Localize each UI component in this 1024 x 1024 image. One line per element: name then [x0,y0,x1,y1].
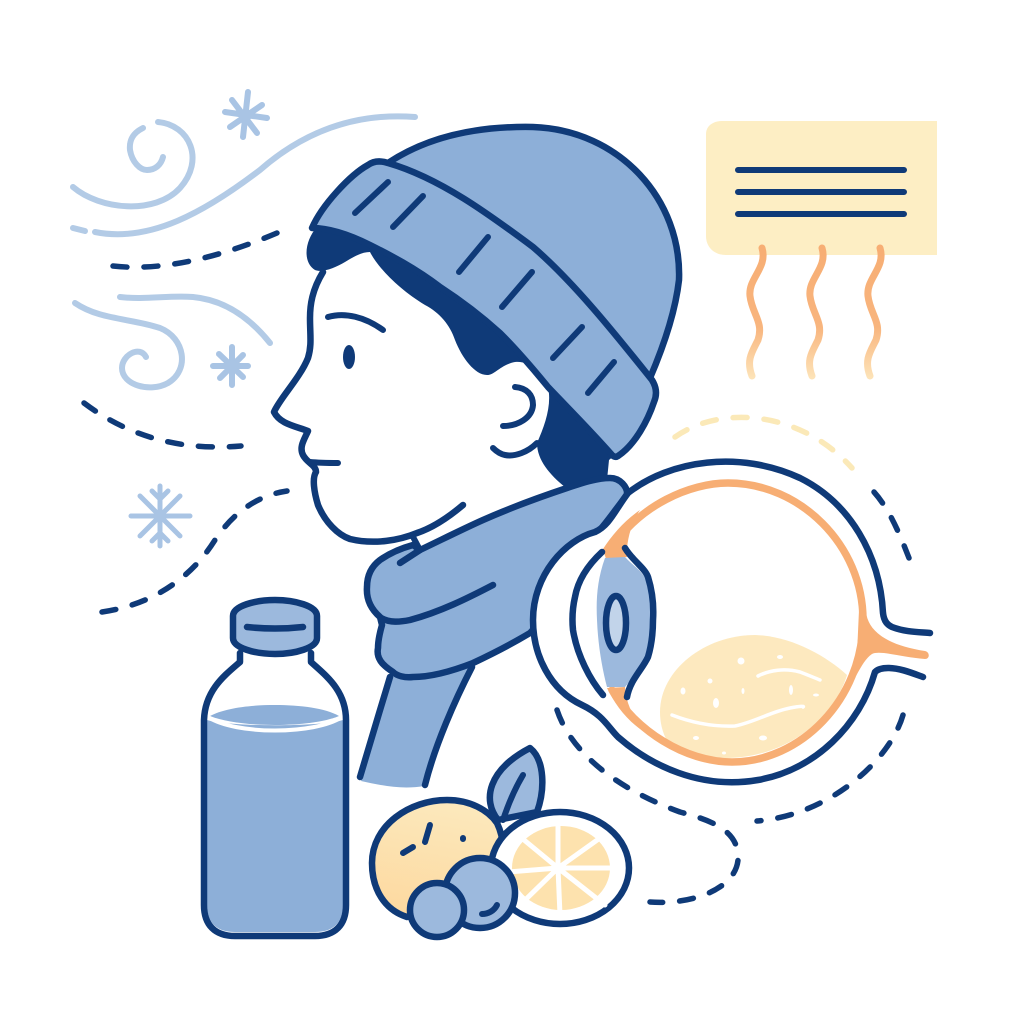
warm air waves [750,248,881,376]
icon: snowflake top [225,92,267,137]
retina yellow [660,635,847,758]
eye outline [533,462,930,782]
hair [307,227,615,487]
scarf tail [360,663,474,787]
bottle outline [204,653,346,936]
lemon slice [491,812,629,924]
bottle cap [233,600,317,654]
icon: eye cross-section [533,462,930,782]
icon: wind swirls and air currents [73,116,415,387]
orange ring [612,483,863,762]
mouth [310,462,338,463]
retina speckles [680,655,819,754]
vent lines [738,170,904,214]
icon: snowflake middle [213,347,248,385]
icon: person's head [274,227,615,550]
blueberry large [445,858,515,928]
lemon flesh [512,826,610,910]
face outline [274,272,463,542]
inner ear [503,387,533,426]
scarf crease [381,585,493,622]
whole lemon [372,800,503,917]
blueberry mark [482,905,497,914]
retina highlights [672,706,803,726]
lemon marks [403,825,463,853]
ciliary body top [603,510,640,559]
dashed air lines [84,233,287,612]
cap ridge [247,627,303,628]
eyebrow [328,315,383,330]
water highlight [208,717,342,730]
neck [412,535,420,550]
lemon segments [508,820,615,915]
lens [597,557,653,687]
front chamber [572,552,603,695]
pupil [606,596,626,650]
dashed lines around the eye [557,417,909,902]
icon: scarf [360,478,627,787]
icon: fruit group [372,748,629,937]
panel: air conditioner [706,121,937,376]
sclera [533,462,930,782]
ear [493,443,537,455]
icon: snowflake bottom [131,486,190,546]
eye [343,345,355,369]
ciliary body bottom [607,687,650,735]
water surface [210,705,339,725]
leaf [490,748,542,820]
optic nerve [856,610,929,676]
scarf fold top [400,550,420,563]
leaf vein [503,775,523,820]
scarf rolls [367,478,627,677]
water [207,720,343,932]
icon: water bottle [204,600,346,936]
cornea [625,548,653,697]
blueberry small [410,883,464,937]
icon: beanie hat [312,127,679,457]
